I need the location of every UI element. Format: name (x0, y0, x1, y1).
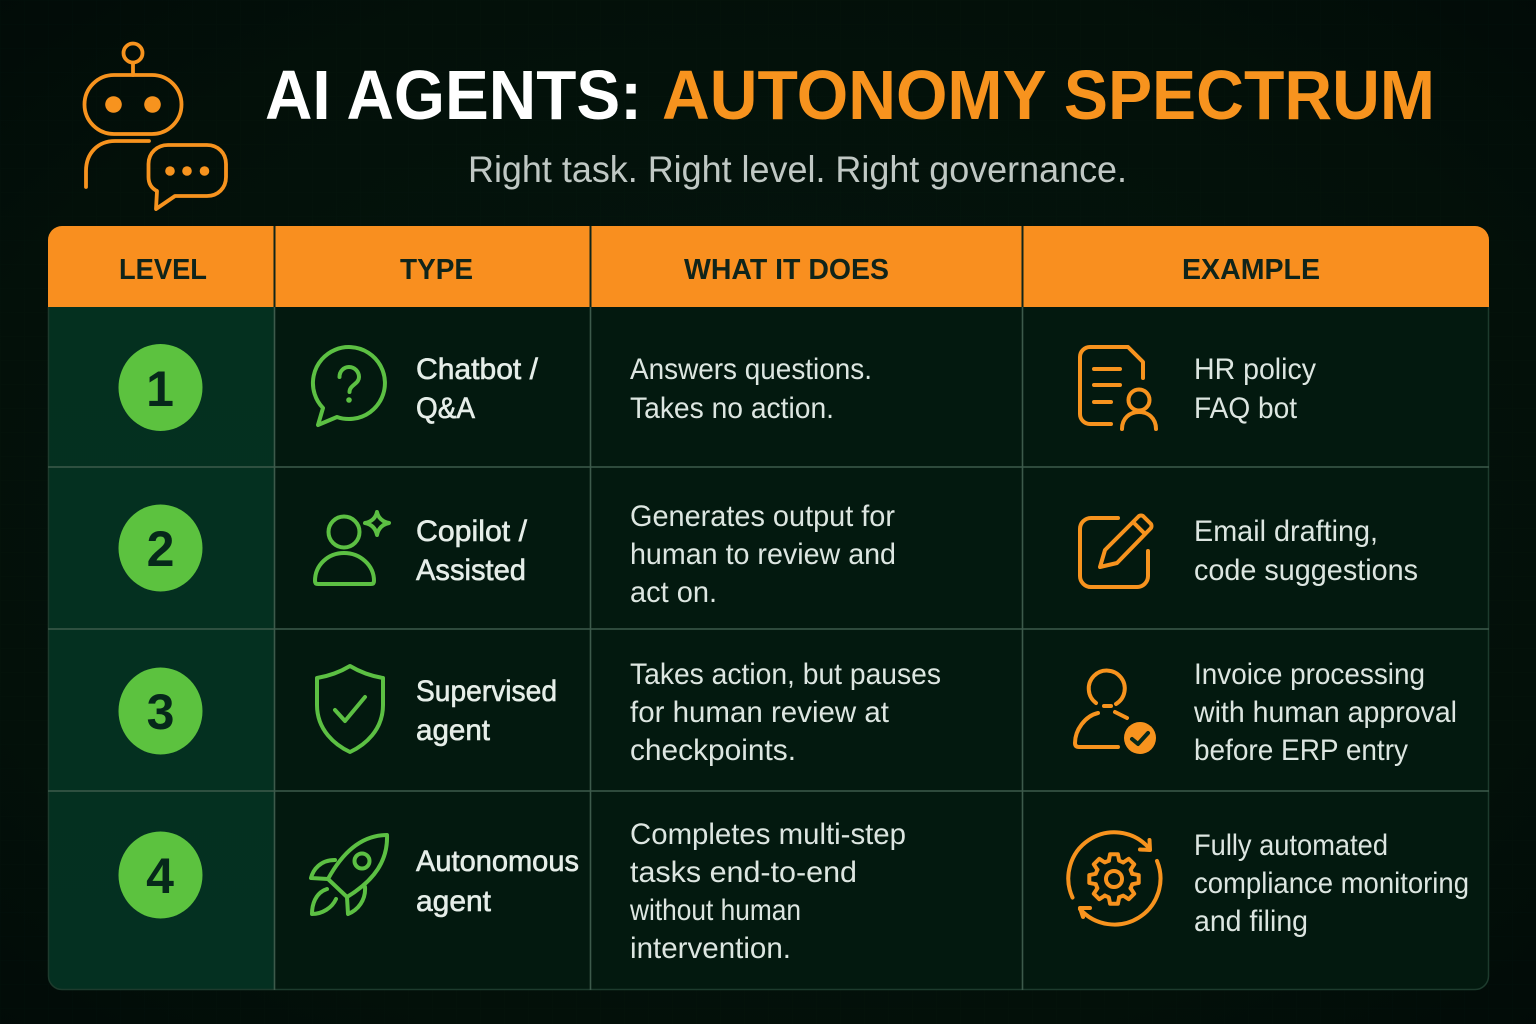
what it does: level 4: Completes multi-step (630, 818, 906, 851)
type: autonomous agent: Autonomous (416, 845, 579, 878)
level badge 1: 1 (146, 361, 174, 417)
table (48, 226, 1489, 990)
level badge 3: 3 (147, 684, 174, 740)
row 2 (118, 500, 1418, 609)
header: what it does: WHAT IT DOES (684, 254, 889, 286)
example: level 4: and filing (1194, 905, 1308, 938)
level badge 2: 2 (147, 521, 174, 577)
what it does: level 2: act on. (630, 576, 717, 609)
type: chatbot: Chatbot / (416, 353, 539, 386)
level badge 4: 4 (146, 848, 174, 904)
type: copilot: Assisted (416, 554, 526, 587)
type: chatbot: Q&A (416, 392, 475, 425)
icon: shield with check (317, 666, 383, 752)
level badge 4 (118, 832, 202, 918)
title: AI AGENTS: (265, 56, 642, 134)
example: level 2: Email drafting, (1194, 515, 1378, 548)
example: level 3: with human approval (1193, 696, 1457, 729)
what it does: level 3: Takes action, but pauses (630, 658, 941, 691)
table header (119, 254, 1320, 286)
icon: person with sparkle (315, 512, 389, 584)
what it does: level 1: Takes no action. (630, 392, 834, 425)
example: level 4: Fully automated (1194, 829, 1388, 862)
icon: pencil editing square (1080, 516, 1152, 587)
example: level 3: Invoice processing (1194, 658, 1425, 691)
row 1 (118, 344, 1316, 431)
what it does: level 4: tasks end-to-end (630, 856, 857, 889)
what it does: level 2: human to review and (630, 538, 896, 571)
type: copilot: Copilot / (416, 515, 528, 548)
icon: rocket (311, 835, 387, 914)
header: example: EXAMPLE (1182, 254, 1320, 286)
type: autonomous agent: agent (416, 885, 492, 918)
what it does: level 4: intervention. (630, 932, 791, 965)
type: supervised agent: agent (416, 714, 491, 747)
what it does: level 4: without human (629, 894, 801, 927)
subtitle: Right task. Right level. Right governance. (468, 149, 1127, 190)
icon: document with person (1080, 347, 1156, 429)
level badge 3 (118, 668, 202, 754)
header: level: LEVEL (119, 254, 207, 286)
row 3 (118, 658, 1457, 767)
example: level 1: HR policy (1194, 353, 1316, 386)
icon: person with check badge (1075, 671, 1156, 754)
example: level 4: compliance monitoring (1194, 867, 1469, 900)
what it does: level 2: Generates output for (630, 500, 895, 533)
example: level 3: before ERP entry (1194, 734, 1408, 767)
level badge 1 (118, 344, 202, 431)
what it does: level 3: checkpoints. (630, 734, 796, 767)
what it does: level 3: for human review at (630, 696, 890, 729)
type: supervised agent: Supervised (416, 675, 557, 708)
icon: gear with cycle arrows (1068, 832, 1160, 925)
icon: question bubble (313, 347, 385, 425)
icon: robot with speech bubble (84, 44, 226, 209)
example: level 1: FAQ bot (1194, 392, 1298, 425)
what it does: level 1: Answers questions. (630, 353, 872, 386)
example: level 2: code suggestions (1194, 554, 1418, 587)
title accent: AUTONOMY SPECTRUM (662, 56, 1435, 134)
row 4 (118, 818, 1469, 965)
header: type: TYPE (400, 254, 473, 286)
level badge 2 (118, 504, 202, 592)
